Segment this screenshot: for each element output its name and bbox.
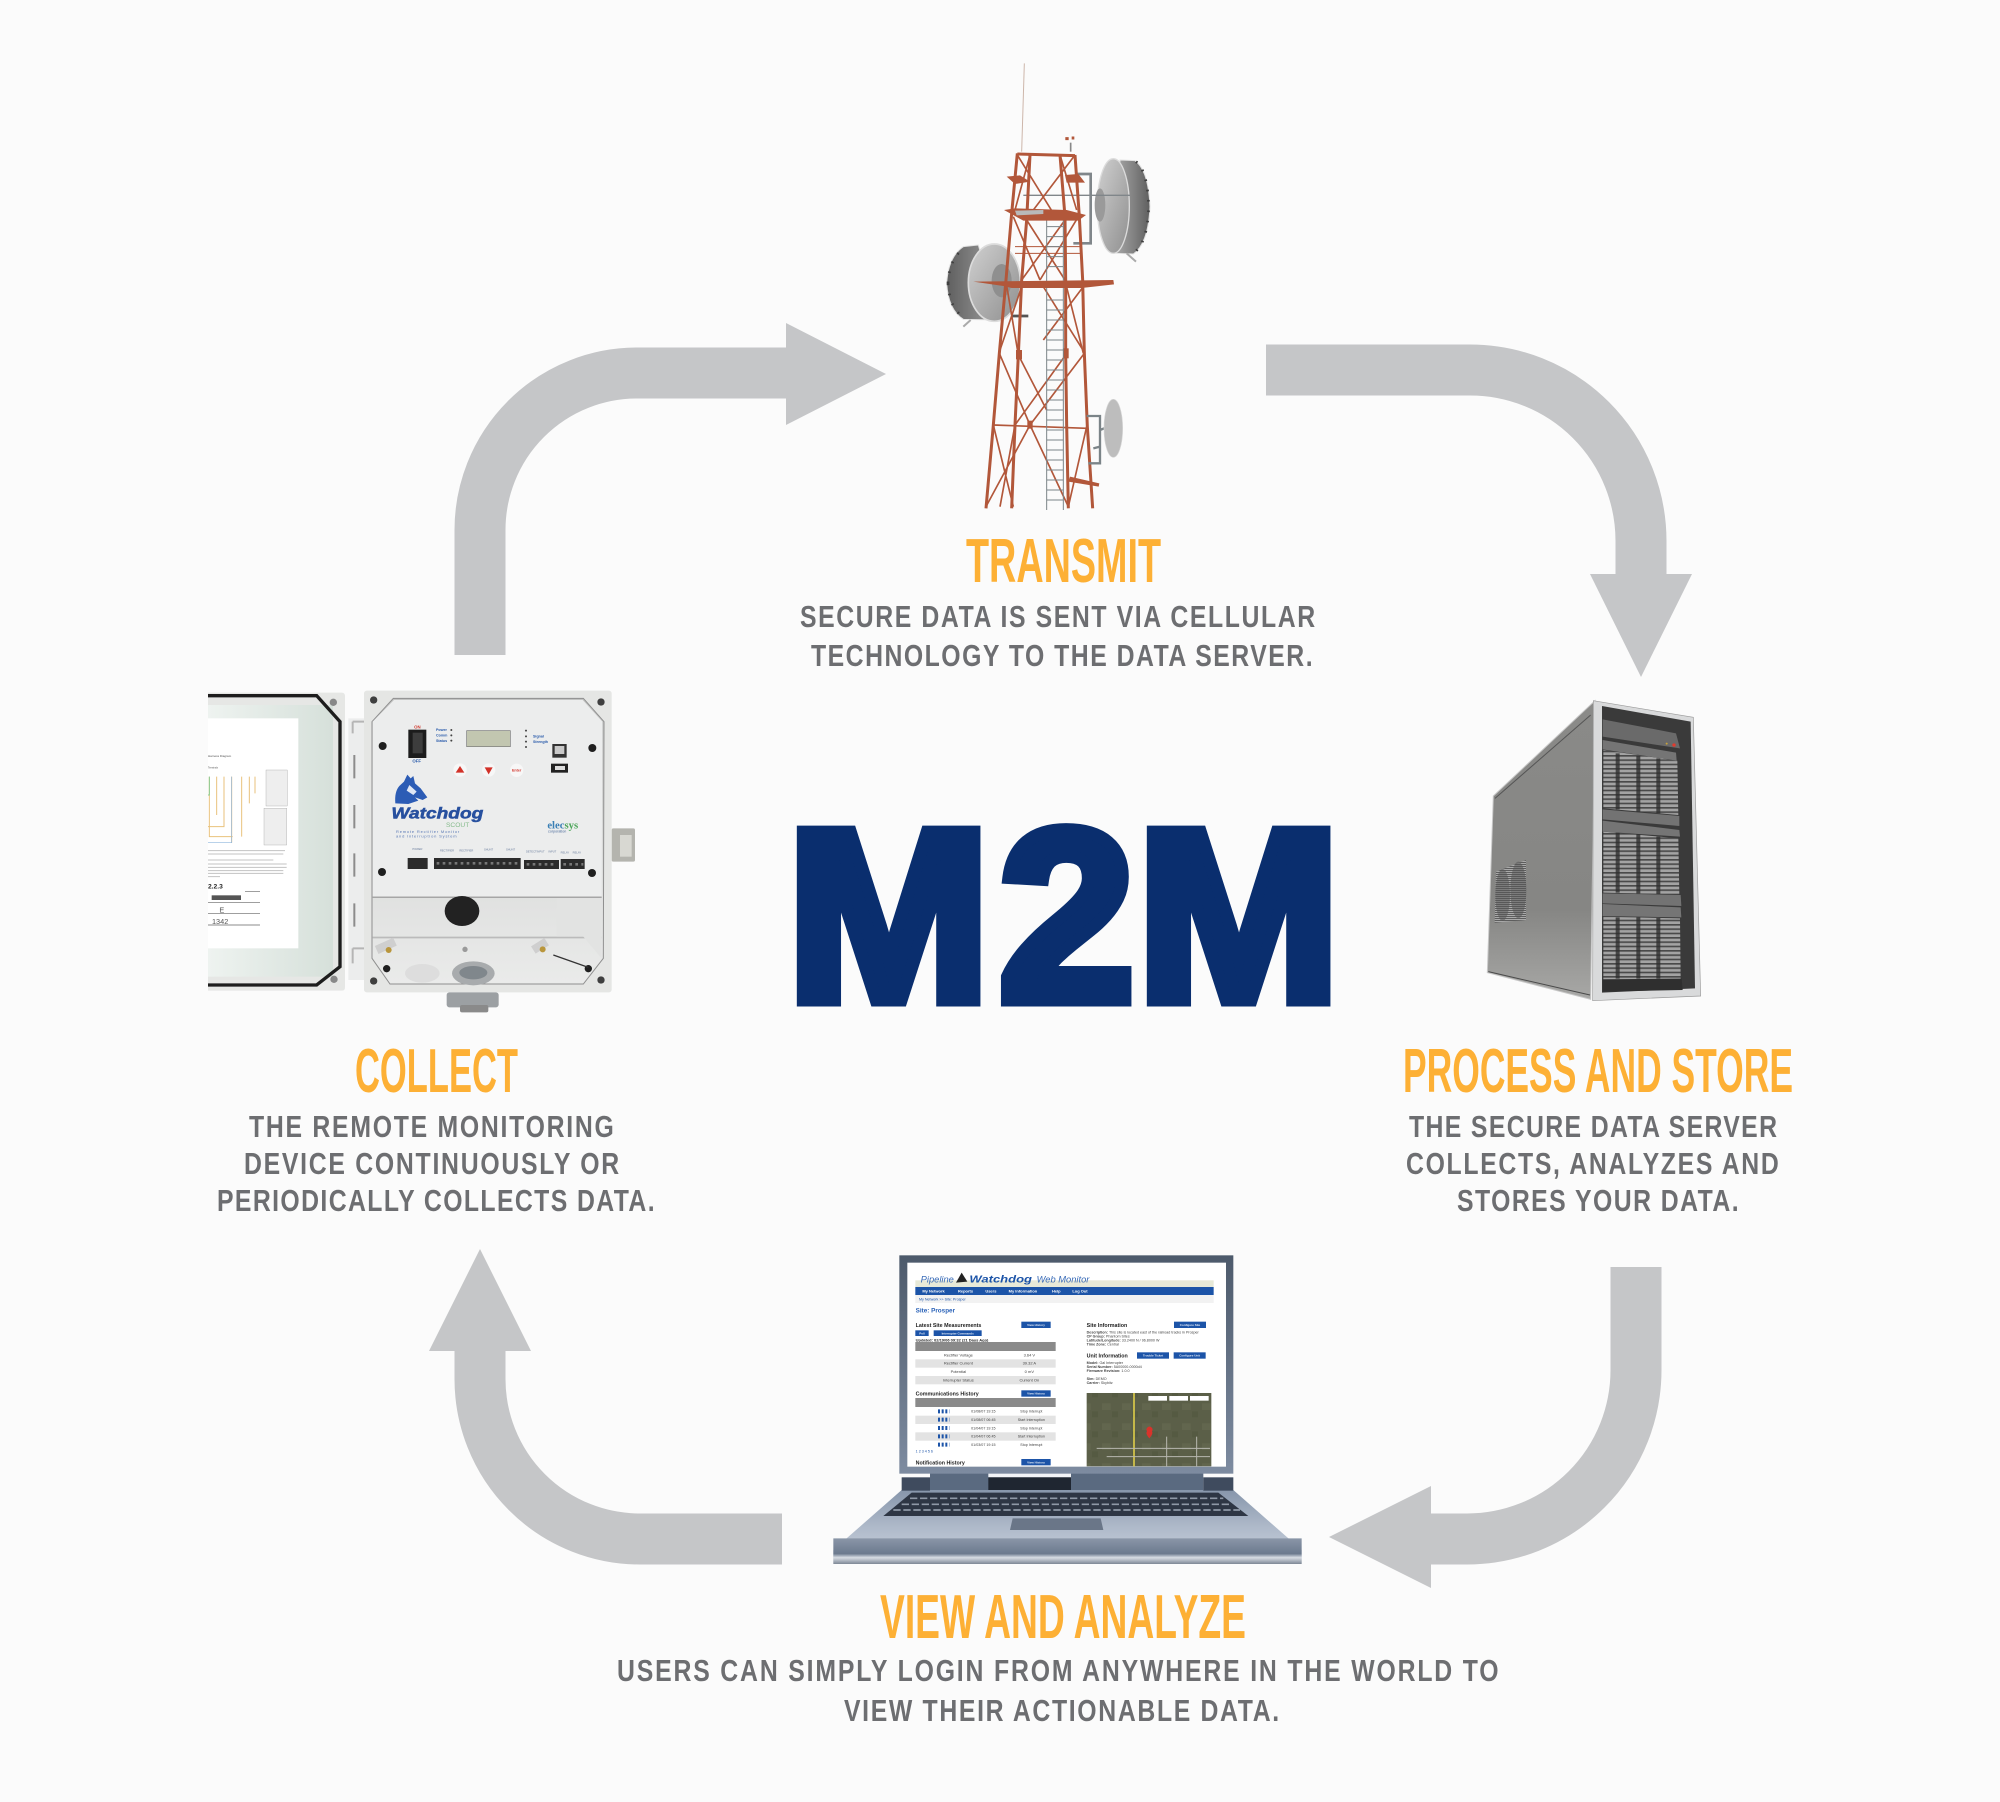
icon: laptop with web monitor: 0 mV bbox=[1025, 1369, 1034, 1374]
icon: remote monitoring device: RECTIFIER bbox=[440, 849, 454, 853]
icon: remote monitoring device: RELAY bbox=[573, 850, 581, 854]
icon: laptop with web monitor: Model: Gal Interrupter bbox=[1087, 1361, 1124, 1365]
icon: laptop with web monitor: Potential bbox=[951, 1369, 966, 1374]
icon: laptop with web monitor: My Network >> Site: Prosper bbox=[919, 1298, 967, 1302]
icon: laptop with web monitor: Current On bbox=[1019, 1377, 1039, 1382]
icon: laptop with web monitor: Rectifier Voltage bbox=[944, 1352, 974, 1357]
text: transmit description: SECURE DATA IS SENT VIA CELLULAR bbox=[800, 599, 1315, 634]
icon: remote monitoring device bbox=[208, 691, 635, 1012]
icon: remote monitoring device: Remote Rectifier Monitor bbox=[396, 829, 460, 834]
icon: laptop with web monitor: Start Interruption bbox=[1018, 1418, 1045, 1422]
icon: remote monitoring device: Comm bbox=[436, 734, 448, 738]
icon: laptop with web monitor: 3.64 V bbox=[1024, 1352, 1035, 1357]
icon: server tower bbox=[1487, 701, 1701, 1001]
icon: laptop with web monitor: Stop Interrupt bbox=[1020, 1443, 1042, 1447]
icon: laptop with web monitor: Notification History bbox=[916, 1460, 965, 1466]
icon: laptop with web monitor bbox=[833, 1255, 1302, 1564]
icon: laptop with web monitor: Rectifier Current bbox=[944, 1361, 974, 1366]
icon: remote monitoring device: Status bbox=[436, 739, 447, 743]
heading: transmit: TRANSMIT bbox=[966, 527, 1161, 596]
text: collect description: DEVICE CONTINUOUSLY OR bbox=[244, 1146, 619, 1181]
icon: laptop with web monitor: 01/04/07 06:45 bbox=[971, 1435, 996, 1439]
icon: laptop with web monitor: 01/08/07 19:15 bbox=[971, 1410, 996, 1414]
icon: laptop with web monitor: View History bbox=[1027, 1460, 1045, 1464]
icon: remote monitoring device: SCOUT bbox=[446, 822, 469, 829]
icon: remote monitoring device: Enter bbox=[512, 769, 522, 773]
icon: laptop with web monitor: Log Out bbox=[1072, 1288, 1088, 1293]
icon: laptop with web monitor: CP Group: Phantom Sites bbox=[1087, 1334, 1130, 1338]
icon: laptop with web monitor: Poll bbox=[919, 1331, 925, 1335]
icon: laptop with web monitor: Stop Interrupt bbox=[1020, 1410, 1042, 1414]
icon: remote monitoring device: Strength bbox=[533, 740, 548, 744]
icon: remote monitoring device: SHUNT bbox=[506, 848, 516, 852]
icon: laptop with web monitor: Interrupter Commands bbox=[942, 1331, 974, 1335]
icon: remote monitoring device: Signal bbox=[533, 735, 544, 739]
text: process and store description: STORES YOUR DATA. bbox=[1457, 1183, 1739, 1218]
icon: remote monitoring device: RECTIFIER bbox=[459, 849, 473, 853]
icon: remote monitoring device: E bbox=[219, 905, 224, 914]
text: view and analyze description: VIEW THEIR ACTIONABLE DATA. bbox=[844, 1693, 1279, 1728]
icon: laptop with web monitor: Firmware Revision: 1.0.0 bbox=[1087, 1369, 1130, 1373]
arrow: process to view bbox=[1329, 1267, 1636, 1588]
text: view and analyze description: USERS CAN SIMPLY LOGIN FROM ANYWHERE IN THE WORLD TO bbox=[617, 1653, 1499, 1688]
icon: laptop with web monitor: Time Zone: Central bbox=[1087, 1343, 1119, 1347]
icon: laptop with web monitor: Stop Interrupt bbox=[1020, 1426, 1042, 1430]
icon: laptop with web monitor: 39.32 A bbox=[1023, 1361, 1036, 1366]
icon: laptop with web monitor: Reports bbox=[958, 1288, 974, 1293]
text: collect description: PERIODICALLY COLLECTS DATA. bbox=[217, 1183, 655, 1218]
icon: laptop with web monitor: 1 2 3 4 5 6 bbox=[916, 1450, 933, 1454]
text: transmit description bbox=[800, 599, 1315, 673]
text: collect description bbox=[217, 1109, 655, 1218]
arrow: collect to transmit bbox=[480, 323, 886, 655]
icon: laptop with web monitor: Serial Number: 5A00000-0000d4 bbox=[1087, 1365, 1142, 1369]
title: M2M: M2M bbox=[787, 779, 1340, 1052]
icon: laptop with web monitor: Latest Site Measurements bbox=[916, 1323, 981, 1329]
icon: remote monitoring device: and Interruption System bbox=[396, 834, 457, 839]
icon: remote monitoring device: RELAY bbox=[561, 850, 569, 854]
icon: laptop with web monitor: Description: This site is located east of the railroad tracks in Prosper bbox=[1087, 1330, 1200, 1334]
text: process and store description: THE SECURE DATA SERVER bbox=[1409, 1109, 1777, 1144]
icon: remote monitoring device: 2.2.3 bbox=[208, 883, 223, 890]
arrow: transmit to process bbox=[1266, 370, 1692, 677]
icon: laptop with web monitor: Watchdog bbox=[969, 1275, 1032, 1286]
heading: collect: COLLECT bbox=[355, 1037, 518, 1106]
icon: laptop with web monitor: Configure Unit bbox=[1179, 1354, 1200, 1358]
text: collect description: THE REMOTE MONITORING bbox=[249, 1109, 614, 1144]
icon: laptop with web monitor: My Information bbox=[1009, 1288, 1038, 1293]
icon: laptop with web monitor: View History bbox=[1027, 1323, 1045, 1327]
icon: remote monitoring device: POWER bbox=[412, 847, 422, 851]
icon: remote monitoring device: Harness Diagram bbox=[208, 754, 232, 758]
icon: remote monitoring device: SHUNT bbox=[484, 848, 494, 852]
arrow: view to collect bbox=[429, 1249, 782, 1539]
icon: communications tower bbox=[947, 63, 1150, 510]
text: process and store description: COLLECTS, ANALYZES AND bbox=[1406, 1146, 1779, 1181]
text: view and analyze description bbox=[617, 1653, 1499, 1728]
icon: laptop with web monitor: Interrupter Status bbox=[943, 1377, 974, 1382]
icon: remote monitoring device: elecsys bbox=[547, 820, 578, 831]
icon: laptop with web monitor: 01/03/07 19:15 bbox=[971, 1443, 996, 1447]
icon: laptop with web monitor: Updated: 02/19/06 09:32 (21 Days Ago) bbox=[916, 1338, 989, 1343]
icon: laptop with web monitor: Site Information bbox=[1087, 1323, 1127, 1329]
text: transmit description: TECHNOLOGY TO THE DATA SERVER. bbox=[811, 638, 1313, 673]
icon: remote monitoring device: 1342 bbox=[212, 917, 228, 926]
icon: remote monitoring device: corporation bbox=[548, 830, 566, 834]
icon: laptop with web monitor: Pipeline bbox=[921, 1275, 954, 1285]
icon: remote monitoring device: Watchdog bbox=[391, 806, 484, 823]
icon: remote monitoring device: OFF bbox=[412, 759, 421, 764]
icon: laptop with web monitor: View History bbox=[1027, 1392, 1045, 1396]
icon: laptop with web monitor: Help bbox=[1052, 1288, 1061, 1293]
icon: laptop with web monitor: Start Interruption bbox=[1018, 1435, 1045, 1439]
icon: laptop with web monitor: Latitude/Longitude: 33.2400 N / 96.8000 W bbox=[1087, 1338, 1160, 1342]
icon: laptop with web monitor: 01/08/07 06:45 bbox=[971, 1418, 996, 1422]
icon: remote monitoring device: Power bbox=[436, 728, 448, 732]
icon: remote monitoring device: ON bbox=[414, 725, 421, 730]
heading: view and analyze: VIEW AND ANALYZE bbox=[880, 1583, 1246, 1652]
icon: laptop with web monitor: My Network bbox=[922, 1288, 945, 1293]
icon: remote monitoring device: DETECT bbox=[526, 850, 537, 854]
icon: laptop with web monitor: Web Monitor bbox=[1037, 1275, 1090, 1285]
icon: remote monitoring device: INPUT bbox=[537, 850, 545, 854]
icon: laptop with web monitor: Unit Information bbox=[1087, 1354, 1128, 1360]
icon: laptop with web monitor: Carrier: Skybitz bbox=[1087, 1381, 1113, 1385]
icon: laptop with web monitor: Sim: DEMO bbox=[1087, 1377, 1107, 1381]
icon: laptop with web monitor: Users bbox=[985, 1288, 997, 1293]
icon: remote monitoring device: INPUT bbox=[548, 850, 557, 854]
icon: laptop with web monitor: Trouble Ticket bbox=[1143, 1354, 1163, 1358]
icon: remote monitoring device: Terminals bbox=[208, 766, 219, 769]
text: process and store description bbox=[1406, 1109, 1779, 1218]
icon: laptop with web monitor: Configure Site bbox=[1180, 1323, 1201, 1327]
icon: laptop with web monitor: Site: Prosper bbox=[916, 1308, 956, 1315]
icon: laptop with web monitor: Communications History bbox=[916, 1392, 979, 1398]
icon: laptop with web monitor: 01/04/07 19:15 bbox=[971, 1426, 996, 1430]
